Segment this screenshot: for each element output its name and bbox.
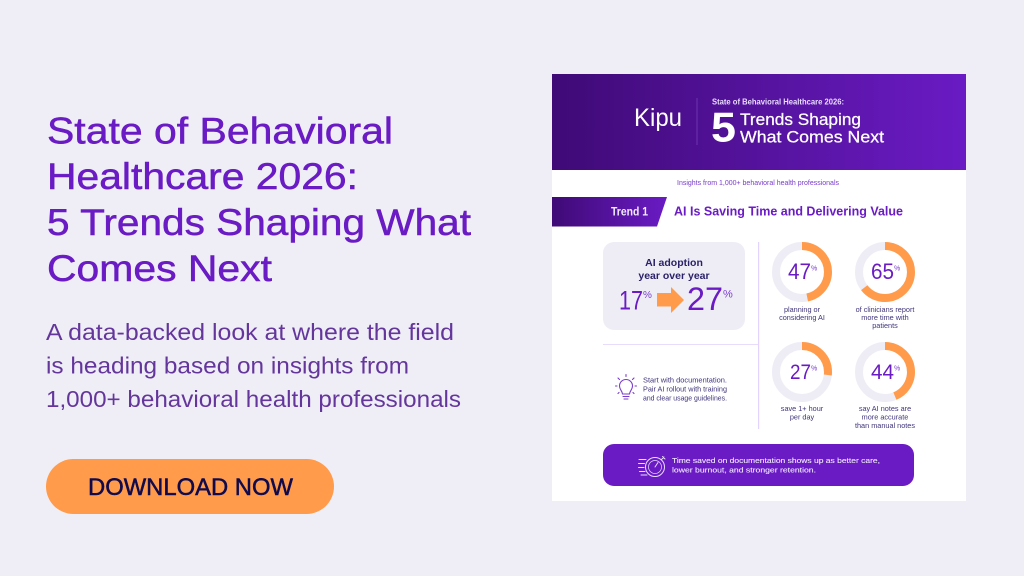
donut: 44% AI notes more accurate: 44 xyxy=(871,361,894,384)
tip text xyxy=(643,376,727,402)
title: Comes Next xyxy=(47,248,273,289)
donut: 65% more time with patients: more time with xyxy=(861,313,909,322)
donut: 47% planning or considering AI xyxy=(776,246,828,322)
takeaway bar: Time saved on documentation shows up as better care, xyxy=(672,456,880,465)
tip text: Pair AI rollout with training xyxy=(643,384,727,394)
title: State of Behavioral xyxy=(47,110,393,152)
donut: 65% more time with patients: % xyxy=(894,266,900,272)
tip text: and clear usage guidelines. xyxy=(643,394,727,402)
donut: 65% more time with patients: of clinicians report xyxy=(856,305,914,314)
donut: 27% save 1+ hour per day: per day xyxy=(790,412,815,422)
title xyxy=(47,110,472,289)
panel: card header: What Comes Next xyxy=(740,128,884,146)
donut: 27% save 1+ hour per day xyxy=(776,346,828,422)
trend 1 banner xyxy=(552,197,667,226)
panel: card header xyxy=(552,74,966,170)
tip text: Start with documentation. xyxy=(643,376,727,384)
AI adoption callout: 27 xyxy=(687,281,723,317)
AI adoption callout: % xyxy=(643,290,652,301)
AI adoption callout: year over year xyxy=(638,270,710,282)
title: Healthcare 2026: xyxy=(47,156,358,197)
donut: 47% planning or considering AI: 47 xyxy=(788,259,811,284)
AI adoption callout: AI adoption xyxy=(645,257,703,269)
title: 5 Trends Shaping What xyxy=(47,202,472,243)
donut: 44% AI notes more accurate: more accurate xyxy=(862,412,908,422)
donut: 47% planning or considering AI: considering AI xyxy=(779,313,825,322)
takeaway bar: lower burnout, and stronger retention. xyxy=(672,466,816,474)
icon: stopwatch xyxy=(638,456,665,476)
donut: 44% AI notes more accurate: % xyxy=(894,366,900,372)
donut: 65% more time with patients: patients xyxy=(872,321,898,330)
description text: A data-backed look at where the field xyxy=(46,319,454,345)
donut: 27% save 1+ hour per day: % xyxy=(811,366,817,372)
donut: 65% more time with patients xyxy=(856,246,914,330)
subtitle: Insights from 1,000+ behavioral health professionals xyxy=(677,178,839,187)
trend heading: AI Is Saving Time and Delivering Value xyxy=(674,204,903,218)
donut: 27% save 1+ hour per day: save 1+ hour xyxy=(781,404,824,413)
icon: light bulb xyxy=(616,374,636,399)
trend 1 banner: Trend 1 xyxy=(611,206,649,218)
donut: 65% more time with patients: 65 xyxy=(871,259,894,284)
takeaway bar xyxy=(603,444,914,486)
panel: card header: Kipu xyxy=(634,104,682,132)
download button xyxy=(46,459,334,514)
panel: infographic preview card xyxy=(552,74,966,501)
AI adoption callout: % xyxy=(723,288,733,300)
donut: 47% planning or considering AI: % xyxy=(811,266,817,272)
AI adoption callout: 17 xyxy=(619,286,643,316)
download button: DOWNLOAD NOW xyxy=(88,474,293,501)
description text xyxy=(46,319,461,412)
description text: is heading based on insights from xyxy=(46,352,409,378)
donut: 27% save 1+ hour per day: 27 xyxy=(790,361,811,384)
panel: card header: State of Behavioral Healthcare 2026: xyxy=(712,98,844,106)
donut: 44% AI notes more accurate xyxy=(855,346,915,430)
AI adoption callout xyxy=(603,242,745,330)
donut: 47% planning or considering AI: planning or xyxy=(784,305,821,314)
panel: card header: 5 xyxy=(711,104,736,150)
description text: 1,000+ behavioral health professionals xyxy=(46,386,461,412)
donut: 44% AI notes more accurate: than manual notes xyxy=(855,421,915,430)
panel: card header: Trends Shaping xyxy=(740,111,861,129)
donut: 44% AI notes more accurate: say AI notes are xyxy=(859,404,911,413)
